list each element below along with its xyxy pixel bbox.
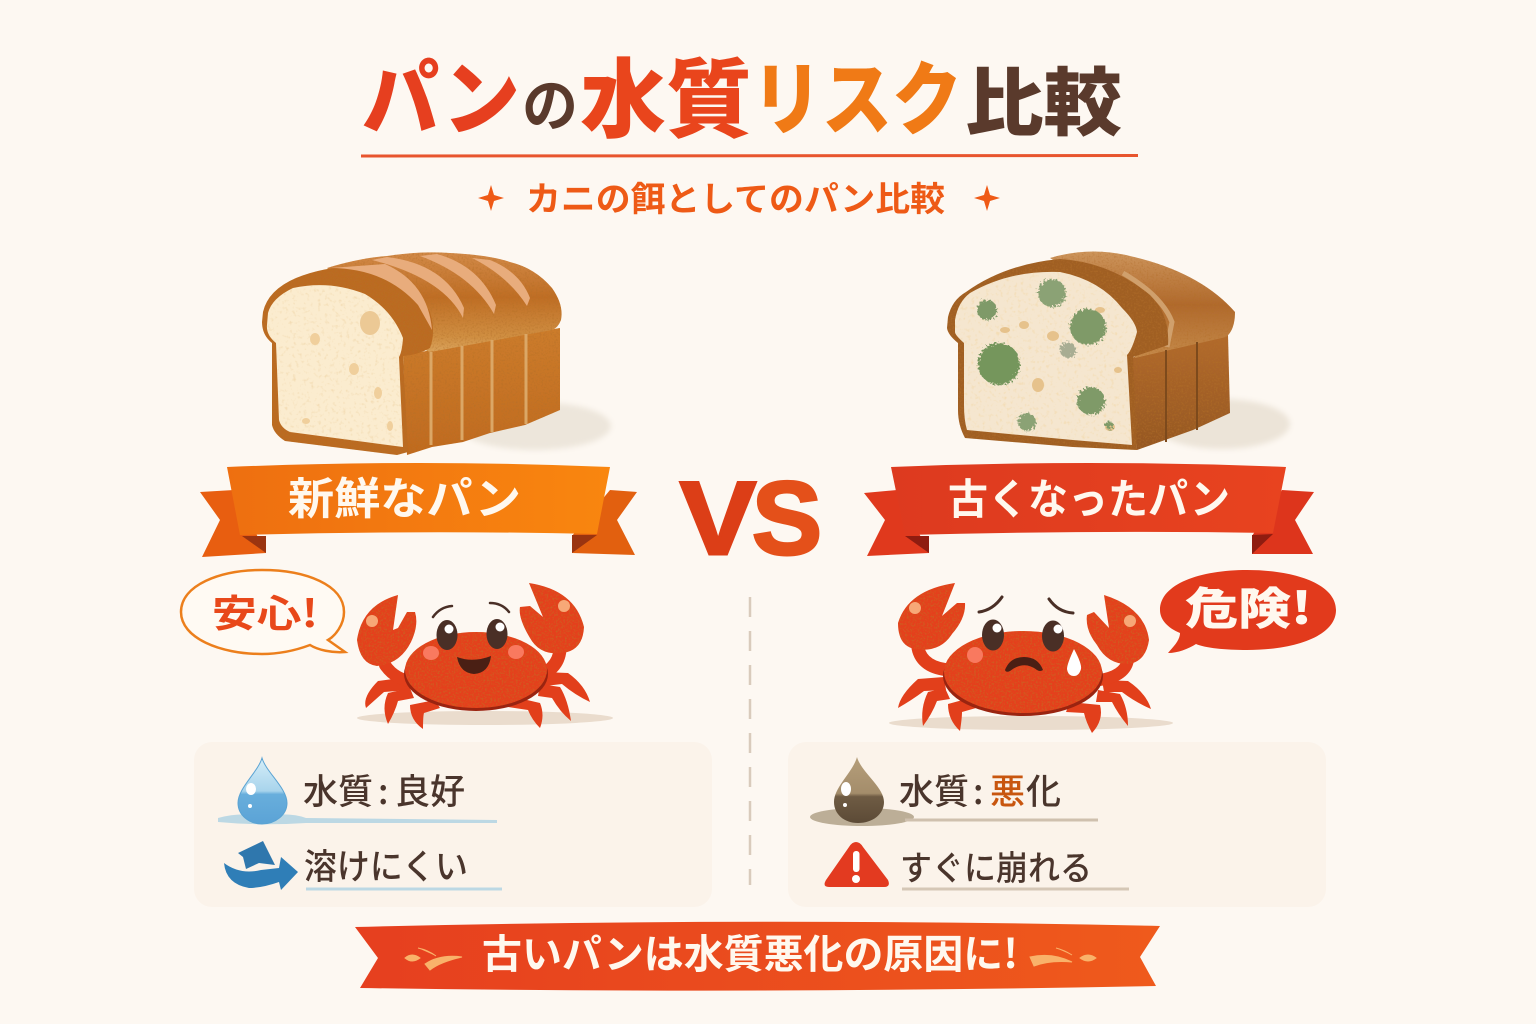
icon: warning triangle bbox=[825, 842, 889, 887]
VS label bbox=[680, 461, 822, 577]
title: パン bbox=[362, 33, 520, 152]
text: water quality worse: 化 bbox=[1026, 764, 1061, 815]
text: water quality good: 良好 bbox=[395, 764, 465, 815]
decoration: left flourish bbox=[405, 948, 462, 970]
text: crumbles quickly: すぐに崩れる bbox=[900, 841, 1092, 890]
bottom conclusion banner bbox=[355, 922, 1160, 991]
illustration: moldy bread bbox=[947, 251, 1290, 450]
icon: dirty water drop bbox=[834, 757, 884, 823]
text: hard to dissolve: 溶けにくい bbox=[304, 839, 468, 890]
banner: fresh bread bbox=[200, 463, 637, 557]
illustration: happy crab bbox=[357, 583, 613, 729]
title: 比較 bbox=[965, 44, 1122, 151]
title: リスク bbox=[752, 36, 962, 152]
banner: fresh bread: 新鮮なパン bbox=[288, 463, 521, 527]
subtitle: カニの餌としてのパン比較 bbox=[526, 172, 945, 221]
VS label: V bbox=[680, 461, 756, 577]
text: water quality good: : bbox=[378, 764, 388, 815]
decoration: right flourish bbox=[1030, 948, 1096, 966]
illustration: fresh bread bbox=[262, 252, 611, 455]
speech bubble: safe: 安心! bbox=[212, 583, 318, 638]
panel: fresh bread results bbox=[194, 742, 712, 907]
text: water quality worse: : bbox=[973, 764, 983, 815]
text: water quality good: 水質 bbox=[303, 764, 373, 815]
text: conclusion: 古いパンは水質悪化の原因に! bbox=[482, 922, 1018, 980]
VS label: S bbox=[752, 461, 822, 577]
banner: stale bread bbox=[864, 463, 1314, 556]
center dashed divider bbox=[749, 597, 751, 885]
text: water quality worse: 水質 bbox=[899, 764, 969, 815]
title: の bbox=[522, 59, 578, 143]
speech bubble: danger: 危険! bbox=[1185, 573, 1312, 637]
panel: stale bread results bbox=[788, 742, 1326, 907]
icon: blue arrows bbox=[224, 841, 298, 890]
underline: water quality good bbox=[218, 814, 497, 824]
title bbox=[362, 30, 1122, 155]
speech bubble: safe bbox=[181, 570, 345, 654]
illustration: sad crab bbox=[889, 583, 1173, 733]
speech bubble: danger bbox=[1160, 570, 1336, 653]
icon: clean water drop bbox=[238, 758, 287, 824]
banner: stale bread: 古くなったパン bbox=[948, 466, 1230, 527]
text: water quality worse: 悪 bbox=[990, 764, 1025, 815]
underline: water quality bad bbox=[810, 808, 1098, 826]
title: 水質 bbox=[580, 30, 752, 155]
